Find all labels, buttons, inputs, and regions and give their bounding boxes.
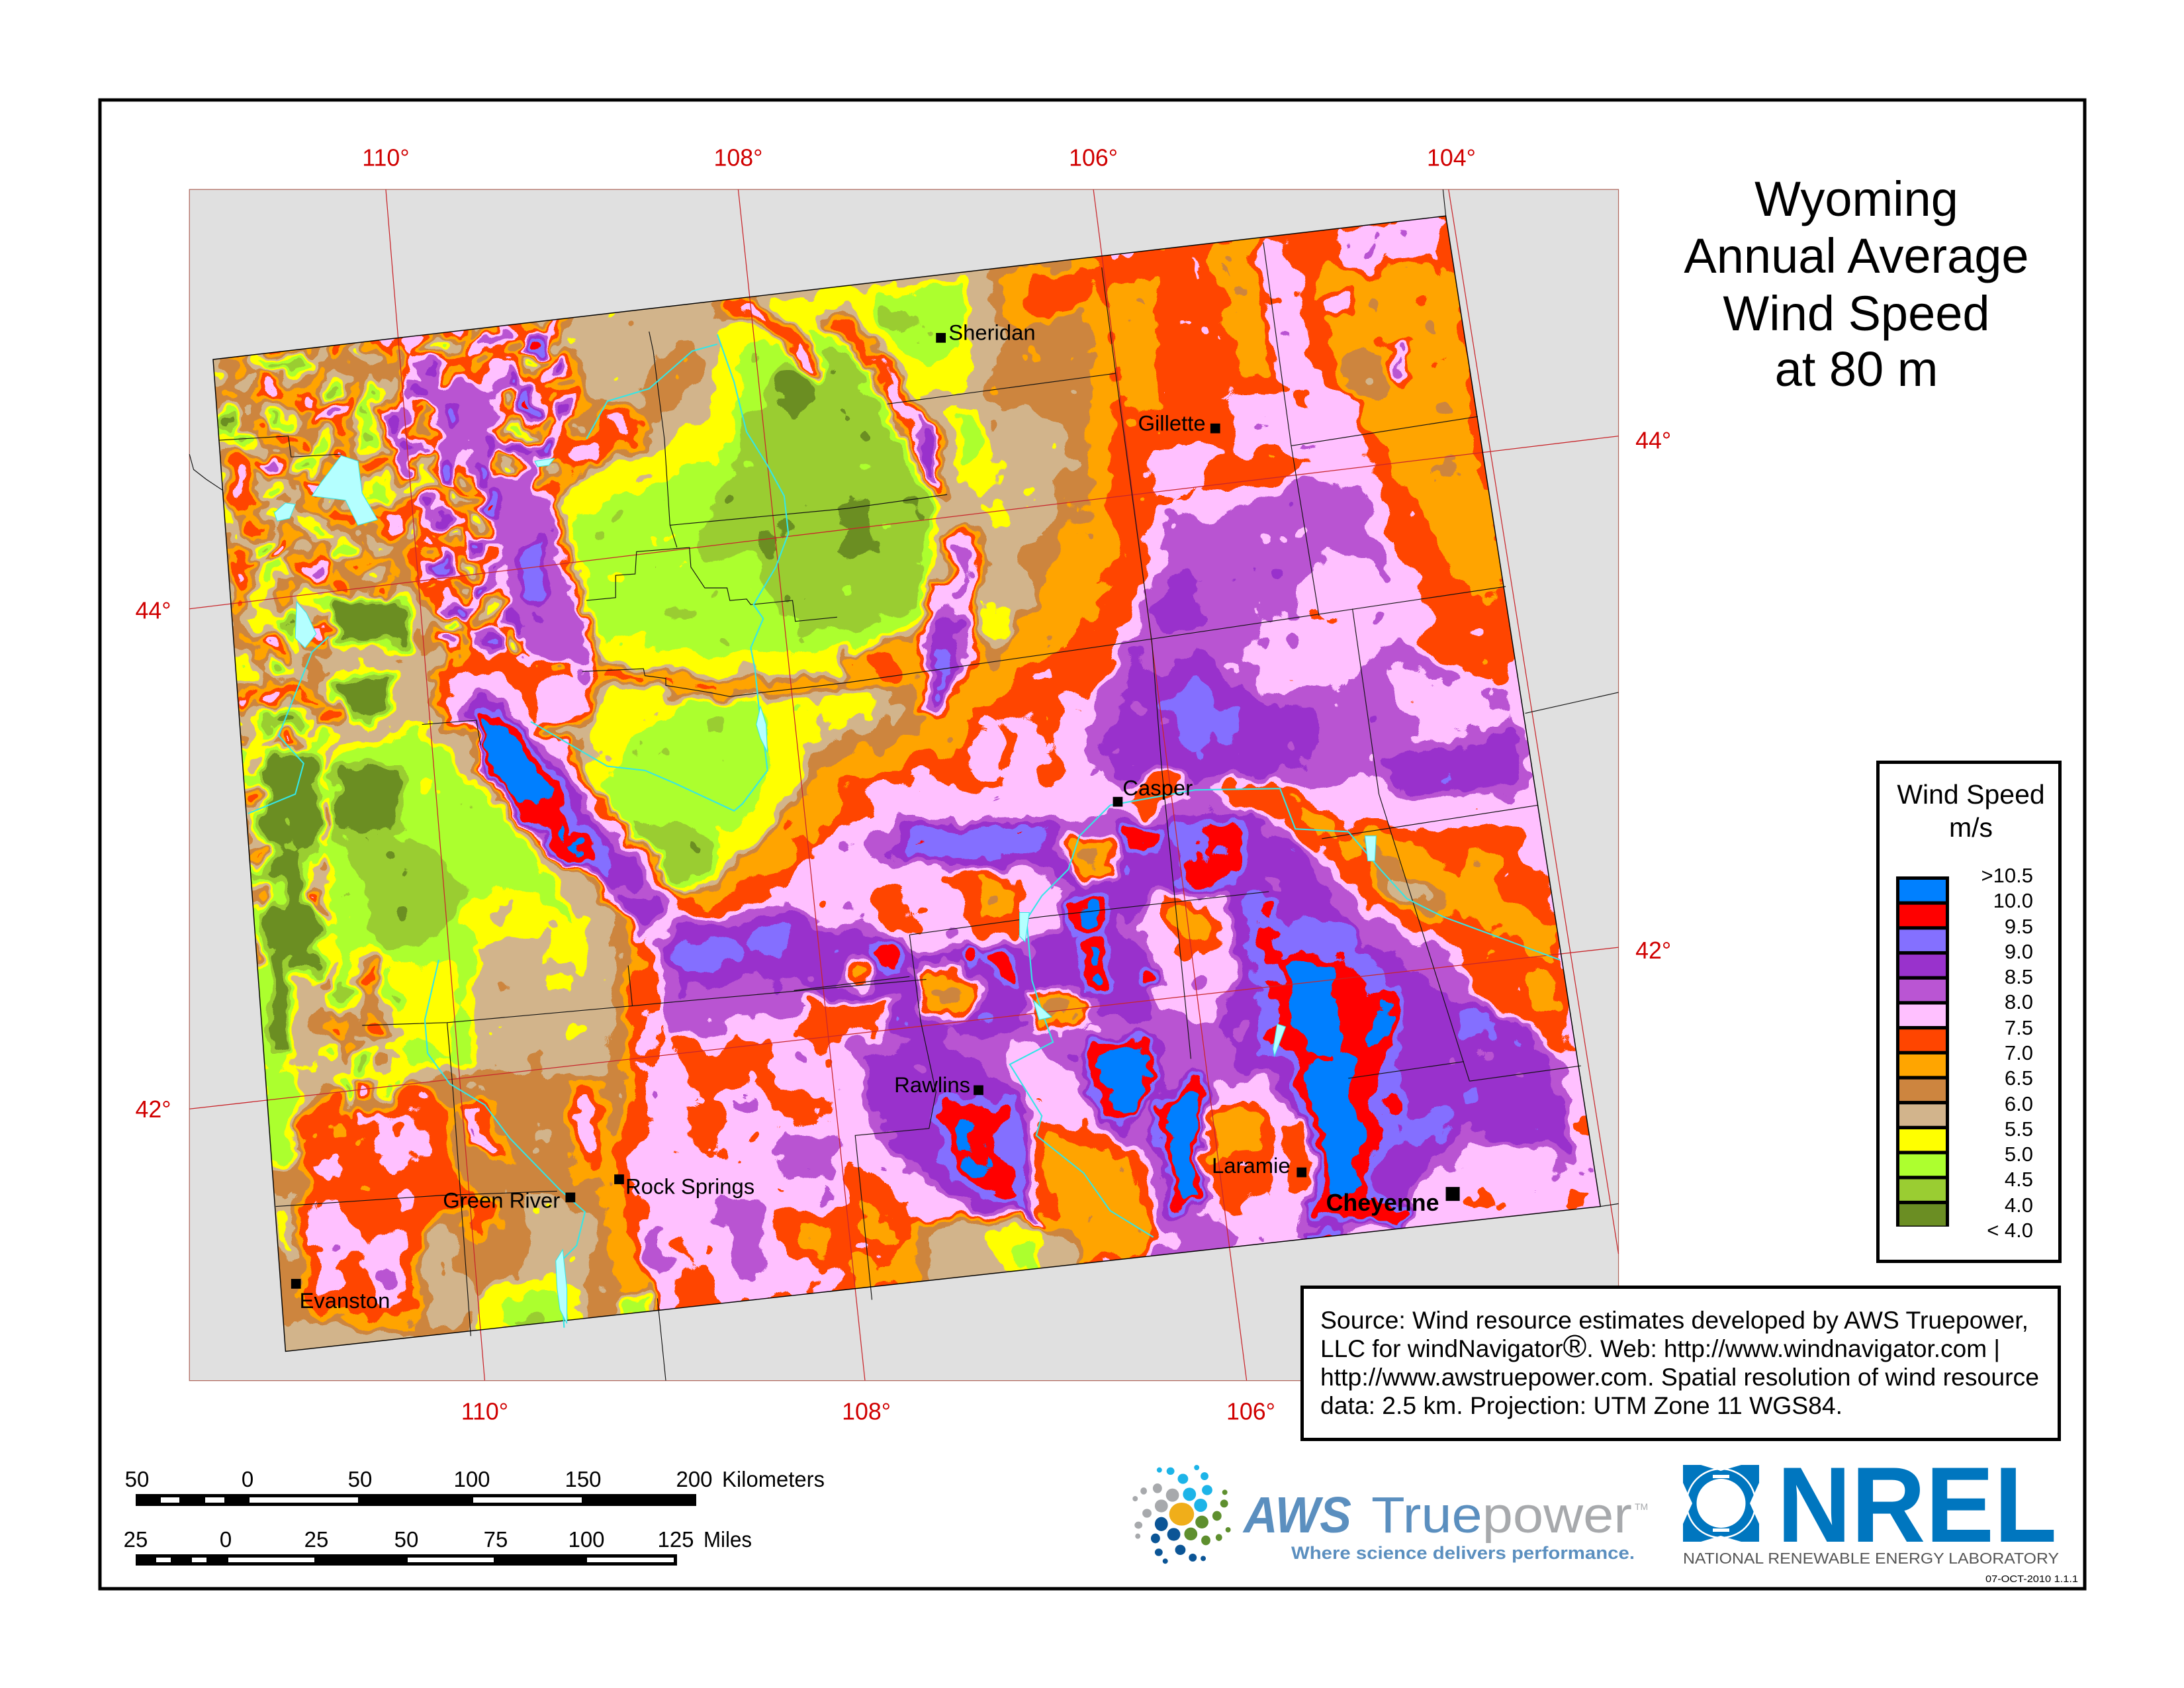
- scale bar: kilometers: 200: [676, 1467, 713, 1491]
- legend panel: [1878, 763, 2060, 1262]
- NE block: [1110, 279, 1163, 411]
- scale bar: kilometers: 100: [453, 1467, 490, 1491]
- graticule labels: 106°: [1226, 1399, 1275, 1425]
- legend title: Wind Speed: [1897, 779, 2045, 810]
- city: Rawlins: Rawlins: [894, 1072, 970, 1097]
- city: Green River: Green River: [443, 1188, 560, 1213]
- source box: [1302, 1287, 2060, 1439]
- city: Casper: Casper: [1122, 776, 1193, 800]
- scale bar: miles: [124, 1527, 752, 1566]
- scale bar: kilometers: Kilometers: [722, 1467, 825, 1491]
- scale bar: miles: Miles: [704, 1527, 752, 1552]
- wind speed contour field: [213, 216, 1600, 1351]
- red cores: [1184, 833, 1209, 886]
- legend labels: 6.5: [2005, 1066, 2033, 1090]
- icon: AWS dot cluster: [1132, 1465, 1231, 1564]
- city: Sheridan: Sheridan: [948, 320, 1036, 345]
- Wind River basin: [585, 682, 822, 906]
- title: at 80 m: [1775, 342, 1938, 397]
- scale bar: miles: 25: [124, 1527, 148, 1552]
- south purple: [662, 794, 1595, 1261]
- source text: data: 2.5 km. Projection: UTM Zone 11 WGS84.: [1320, 1392, 1843, 1419]
- logo: AWS Truepower: [1132, 1465, 1648, 1564]
- graticule labels: [135, 144, 1671, 1425]
- graticule lines: [189, 189, 1619, 1381]
- graticule labels: 42°: [135, 1096, 171, 1123]
- legend labels: 7.0: [2005, 1041, 2033, 1064]
- scale bar: kilometers: 150: [565, 1467, 602, 1491]
- city: Laramie: Laramie: [1212, 1153, 1291, 1178]
- legend labels: 9.5: [2005, 915, 2033, 938]
- pink holes: [780, 829, 1073, 961]
- city: Rock Springs: Rock Springs: [625, 1174, 754, 1199]
- north central purple: [1079, 481, 1532, 794]
- city: Casper: [1113, 776, 1193, 807]
- logo: NREL: [1683, 1445, 2059, 1567]
- legend labels: 5.5: [2005, 1117, 2033, 1141]
- Rock Springs uplift: [634, 1184, 745, 1317]
- title: Annual Average: [1684, 228, 2029, 283]
- graticule labels: 108°: [713, 144, 762, 171]
- graticule labels: 110°: [461, 1399, 508, 1425]
- SE right orange band: [1275, 780, 1567, 1003]
- city: Evanston: [291, 1279, 390, 1313]
- Upper Green basin: [320, 724, 585, 1115]
- graticule labels: 44°: [1635, 428, 1671, 454]
- rivers and lakes: [248, 334, 1560, 1328]
- map panel: Wyoming wind speed: [135, 139, 1671, 1425]
- graticule labels: 106°: [1069, 144, 1118, 171]
- scale bar: miles: 0: [220, 1527, 232, 1552]
- Absaroka and Wind River ridges: [430, 655, 590, 726]
- source text: [1320, 1307, 2039, 1419]
- legend labels: 8.5: [2005, 965, 2033, 988]
- graticule labels: 110°: [362, 144, 410, 171]
- legend labels: [1981, 864, 2033, 1242]
- scale bar: miles: 125: [657, 1527, 694, 1552]
- legend labels: 5.0: [2005, 1143, 2033, 1166]
- scale bar: miles: 75: [484, 1527, 508, 1552]
- orange islands: [1063, 836, 1118, 883]
- legend labels: 10.0: [1993, 889, 2033, 912]
- AWS wordmark: AWS: [1242, 1487, 1351, 1544]
- legend labels: < 4.0: [1987, 1219, 2033, 1242]
- city: Gillette: Gillette: [1138, 410, 1206, 435]
- legend labels: 9.0: [2005, 940, 2033, 963]
- dark green valleys: [329, 765, 404, 836]
- graticule labels: 42°: [1635, 937, 1671, 964]
- graticule labels: 44°: [135, 597, 171, 624]
- purple SE: [1393, 1003, 1581, 1156]
- tagline: Where science delivers performance.: [1291, 1543, 1635, 1563]
- source text: Source: Wind resource estimates developed by AWS Truepower,: [1320, 1307, 2028, 1334]
- legend labels: 7.5: [2005, 1016, 2033, 1039]
- trademark: TM: [1635, 1501, 1648, 1512]
- title: Wind Speed: [1723, 286, 1990, 341]
- scale bar: kilometers: 0: [242, 1467, 253, 1491]
- source text: LLC for windNavigator®. Web: http://www.windnavigator.com |: [1320, 1329, 2000, 1364]
- blue cores: [1103, 1045, 1150, 1111]
- legend labels: 4.5: [2005, 1168, 2033, 1191]
- SW plains patches: [674, 1039, 776, 1092]
- icon: NREL emblem: [1683, 1465, 1759, 1542]
- legend labels: 6.0: [2005, 1092, 2033, 1115]
- county boundaries: [189, 189, 1619, 1381]
- legend swatches: [1896, 876, 1949, 1227]
- map background: [189, 189, 1619, 1381]
- Truepower wordmark: Truepower: [1371, 1487, 1632, 1544]
- scale bar: kilometers: 50: [348, 1467, 372, 1491]
- legend labels: 8.0: [2005, 990, 2033, 1013]
- scale bar: miles: 50: [394, 1527, 418, 1552]
- legend title: [1897, 779, 2045, 843]
- scale bar: miles: 100: [568, 1527, 605, 1552]
- legend title: m/s: [1949, 812, 1993, 843]
- source text: http://www.awstruepower.com. Spatial resolution of wind resource: [1320, 1364, 2039, 1391]
- Bighorn ridge: [827, 316, 939, 494]
- laboratory name: NATIONAL RENEWABLE ENERGY LABORATORY: [1683, 1550, 2059, 1567]
- state outline: [213, 216, 1600, 1351]
- NREL wordmark: NREL: [1777, 1445, 2057, 1565]
- Bighorn basin: [550, 285, 975, 696]
- graticule labels: 104°: [1427, 144, 1476, 171]
- graticule labels: 108°: [842, 1399, 891, 1425]
- scale bar: miles: 25: [304, 1527, 328, 1552]
- city: Cheyenne: Cheyenne: [1326, 1190, 1439, 1216]
- legend labels: >10.5: [1981, 864, 2033, 887]
- legend labels: 4.0: [2005, 1194, 2033, 1217]
- title: [1684, 171, 2029, 397]
- city: Evanston: Evanston: [299, 1288, 390, 1313]
- title: Wyoming: [1754, 171, 1958, 226]
- SW region: [290, 1084, 480, 1321]
- version stamp: 07-OCT-2010 1.1.1: [1985, 1573, 2078, 1585]
- scale bar: kilometers: 50: [125, 1467, 149, 1491]
- scale bar: kilometers: [125, 1467, 825, 1506]
- mottled mountain fields: [209, 328, 418, 655]
